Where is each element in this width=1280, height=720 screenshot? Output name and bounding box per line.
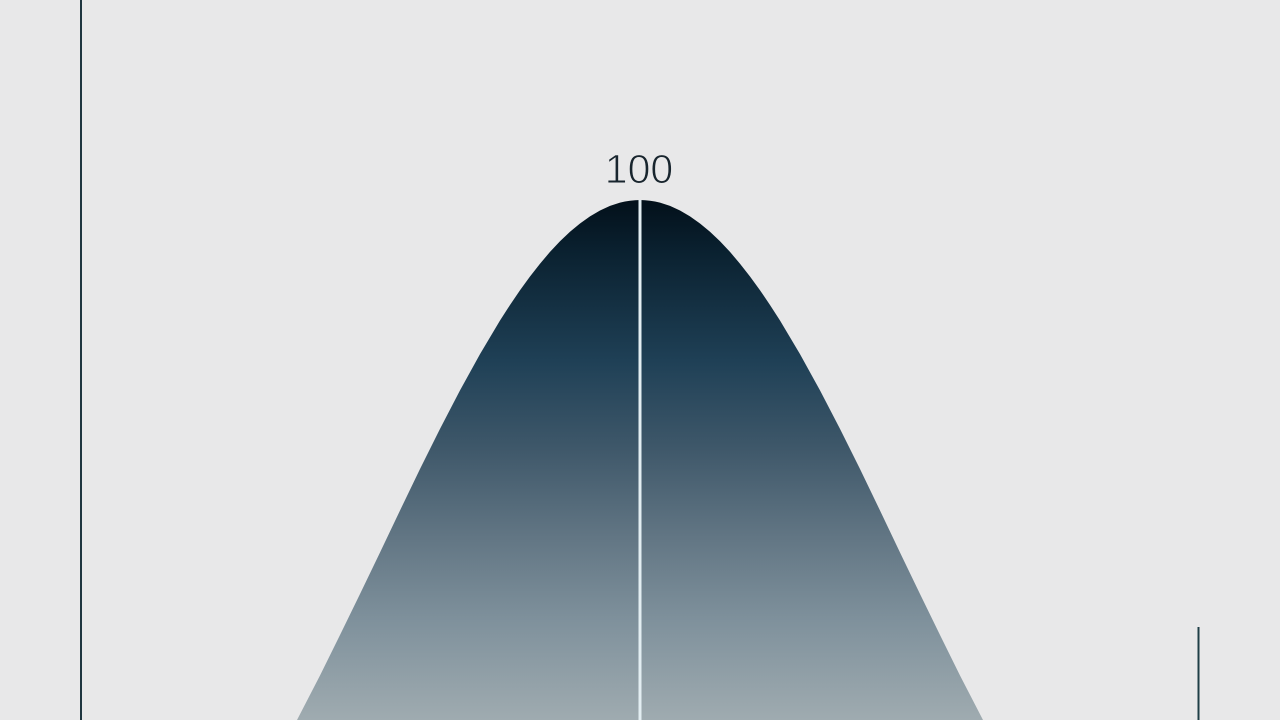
bell curve shape: [290, 200, 990, 720]
right marker line: [1198, 627, 1200, 720]
centre median line: [638, 200, 642, 720]
left axis line: [80, 0, 82, 720]
peak value label: 100: [605, 146, 673, 192]
